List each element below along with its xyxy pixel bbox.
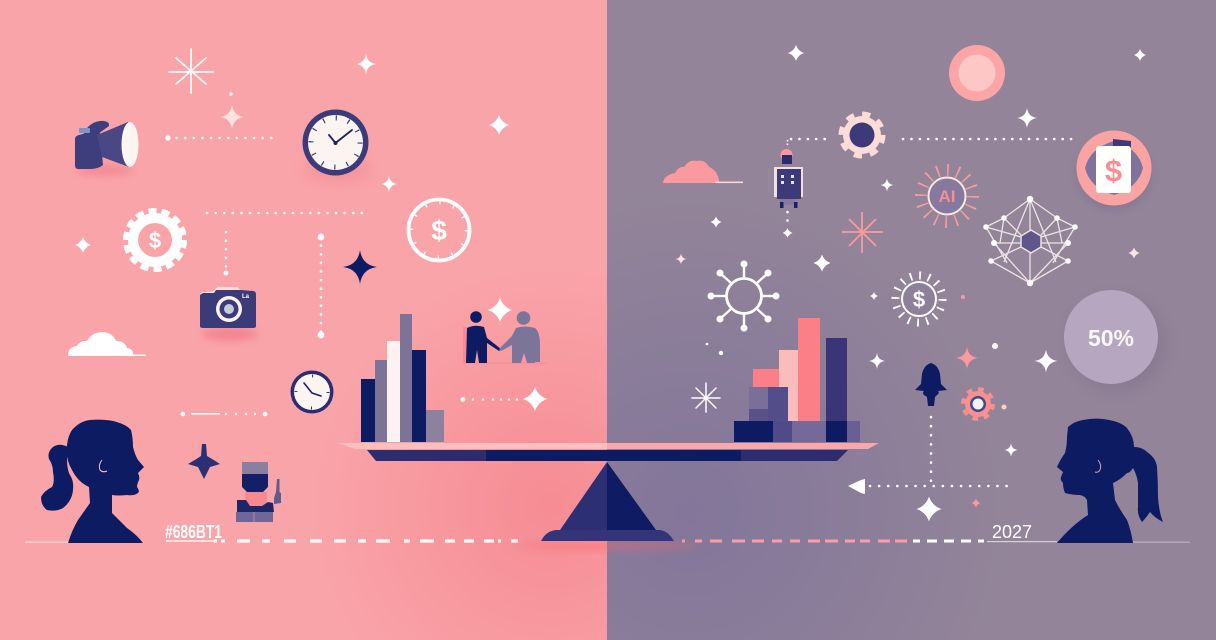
sparkle: [1034, 350, 1058, 372]
connector with sparkle: [461, 387, 547, 411]
icon: dollar gear: $: [149, 228, 161, 253]
sparkle: [870, 292, 878, 300]
icon: worker figure: [236, 462, 281, 522]
year label: 2027: [992, 522, 1032, 542]
dotted connectors: [788, 139, 1076, 227]
small dots: [706, 295, 1006, 410]
icon: spotlight camera: [75, 121, 138, 176]
icon: dollar clock: [408, 200, 470, 260]
dashed timeline: left: [166, 540, 518, 542]
left background glow: [0, 0, 607, 640]
panel: right side: [607, 0, 1216, 640]
timeline label: #686BT1: [165, 522, 222, 542]
sparkle: [814, 254, 830, 272]
sparkle: [1134, 49, 1146, 61]
stat circle: 50%: [1064, 290, 1165, 391]
icon: robot: [774, 140, 803, 238]
sparkle: [916, 496, 942, 522]
sparkle: [489, 115, 509, 135]
sparkle: [1004, 444, 1018, 456]
connector end dots: [165, 92, 324, 338]
icon: AI badge: [921, 170, 973, 222]
beam top: right: [607, 443, 879, 449]
fulcrum foot: [541, 530, 674, 541]
icon: ring with spokes: [708, 260, 780, 332]
icon: dollar no-sign: [1076, 130, 1152, 211]
stat circle: 50%: 50%: [1088, 325, 1134, 351]
icon: dollar no-sign: $: [1105, 153, 1122, 188]
left person silhouette: [25, 420, 144, 543]
icon: dollar sun: [896, 276, 942, 322]
sparkle: pink: [956, 347, 978, 369]
icon: two people shaking hands: [462, 311, 547, 364]
icon: camera: La: [242, 294, 250, 300]
fulcrum right: [607, 462, 656, 530]
icon: burst sparkle: [692, 383, 720, 412]
left background: [0, 0, 607, 640]
icon: dollar gear: [126, 211, 184, 269]
fulcrum left: [560, 462, 607, 530]
bar chart: right pan: [734, 318, 860, 442]
beam centre: [486, 450, 741, 461]
sparkle: [788, 45, 804, 61]
panel: left side: [0, 0, 607, 640]
right background shade: [607, 0, 1216, 640]
sparkle: [710, 216, 722, 228]
sparkle: [880, 178, 894, 192]
icon: pink sparkle burst: [842, 212, 883, 253]
right background: [607, 0, 1216, 640]
dotted connector: arrow to scale: [848, 417, 1008, 494]
sparkle: navy: [343, 250, 377, 284]
sparkle: [1017, 108, 1037, 128]
icon: sparkle burst: [169, 49, 213, 93]
sparkle: [488, 298, 512, 322]
icon: rocket: [915, 363, 947, 406]
icon: pink circle: [949, 45, 1005, 101]
icon: dollar sun: $: [913, 287, 925, 312]
icon: network globe: [983, 196, 1078, 286]
sparkle: [356, 54, 376, 74]
sparkle: [220, 105, 244, 129]
icon: pink cloud: [663, 161, 743, 183]
icon: large clock: [302, 110, 370, 180]
bar chart: left pan: [361, 314, 444, 442]
icon: AI badge: AI: [938, 187, 956, 206]
dotted connectors: [168, 138, 367, 335]
icon: navy arrow marker: [188, 444, 220, 479]
balance scale: [338, 443, 879, 551]
icon: gear: [842, 114, 882, 156]
icon: camera: [200, 287, 258, 341]
sparkle: [869, 353, 885, 369]
sparkle: [75, 237, 91, 253]
sparkle: [381, 176, 397, 192]
beam underside: [367, 450, 848, 461]
connector: line with dots: [181, 412, 267, 416]
icon: small clock: [290, 370, 334, 414]
dashed timeline: right: [682, 541, 1057, 542]
sparkle: [1128, 248, 1140, 258]
sparkle: [676, 254, 686, 264]
icon: white cloud: [68, 332, 146, 356]
right person silhouette: [1057, 419, 1190, 543]
icon: dollar clock: $: [431, 215, 447, 246]
icon: pink gear: [964, 390, 992, 418]
beam top: left: [338, 443, 607, 449]
glow under base: [517, 541, 697, 551]
diamond: pink: [972, 498, 980, 508]
